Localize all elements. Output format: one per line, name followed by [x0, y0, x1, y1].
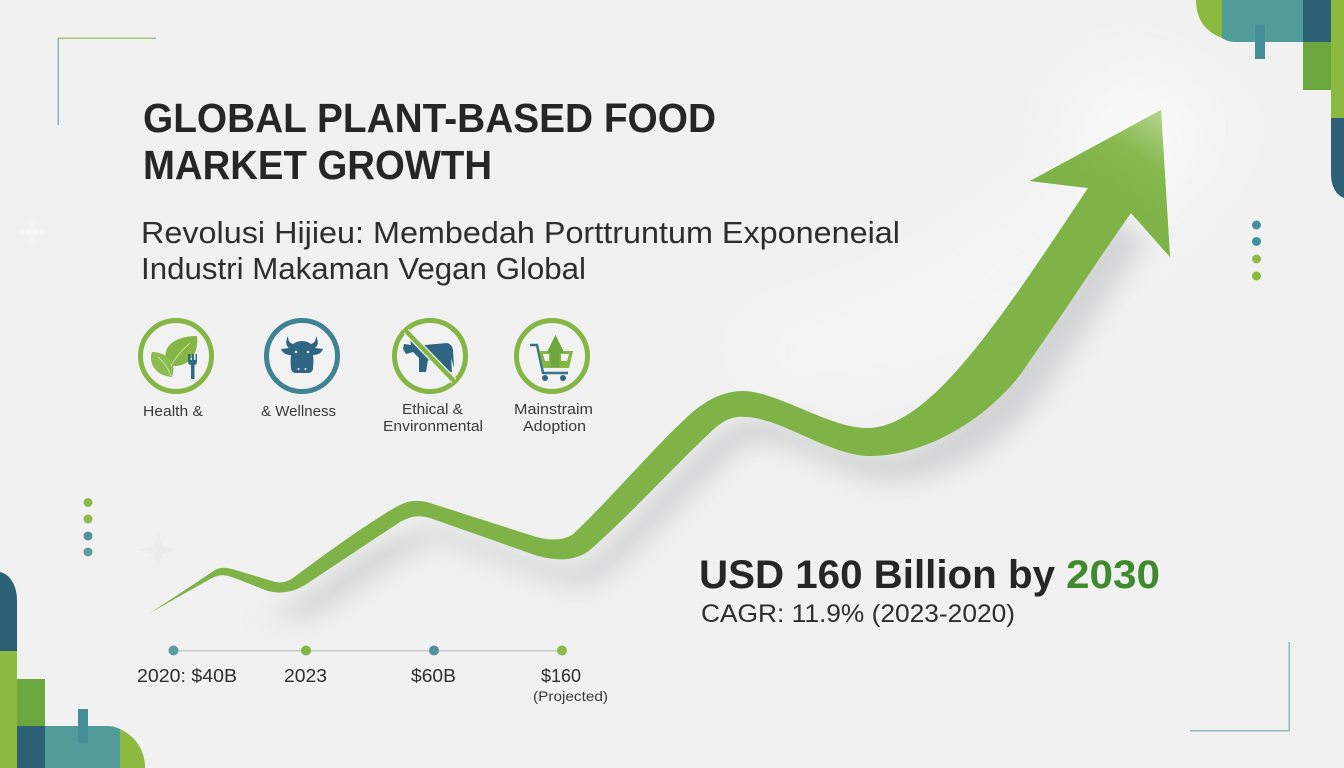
subtitle: Industri Makaman Vegan Global — [141, 251, 586, 286]
label: mainstream adoption: Adoption — [523, 418, 586, 435]
dots: left column — [84, 498, 92, 556]
title — [143, 95, 716, 188]
icon: cow head — [266, 320, 338, 392]
title: GLOBAL PLANT-BASED FOOD — [143, 95, 716, 141]
timeline — [137, 646, 608, 704]
corner decoration: top right blocks — [1196, 0, 1344, 198]
chart: growth arrow — [148, 110, 1170, 626]
callout: market projection: 2030 — [1066, 553, 1160, 597]
icon: shopping cart with up arrow — [516, 320, 588, 392]
timeline: $60B — [411, 666, 456, 686]
label: ethical and environmental: Ethical & — [402, 401, 463, 418]
label: mainstream adoption: Mainstraim — [514, 401, 593, 418]
dots: right column — [1252, 220, 1261, 280]
label: mainstream adoption — [514, 401, 593, 435]
icon: no cow — [394, 320, 466, 392]
callout: market projection: USD 160 Billion by — [699, 553, 1056, 597]
subtitle — [141, 215, 900, 286]
timeline: $160 — [541, 666, 581, 686]
title: MARKET GROWTH — [143, 142, 492, 188]
icon: health leaves and fork — [140, 320, 212, 392]
label: ethical and environmental: Environmental — [383, 418, 483, 435]
label: ethical and environmental — [383, 401, 483, 435]
timeline: 2023 — [284, 666, 327, 686]
corner bracket: top left — [58, 38, 156, 125]
callout: CAGR: CAGR: 11.9% (2023-2020) — [701, 600, 1015, 628]
corner bracket: bottom right — [1190, 642, 1290, 732]
timeline: (Projected) — [533, 688, 608, 704]
timeline: 2020: $40B — [137, 666, 237, 686]
subtitle: Revolusi Hijieu: Membedah Porttruntum Exponeneial — [141, 215, 900, 250]
corner decoration: bottom left blocks — [0, 572, 145, 768]
label: health: Health & — [143, 403, 203, 420]
label: wellness: & Wellness — [261, 403, 336, 420]
